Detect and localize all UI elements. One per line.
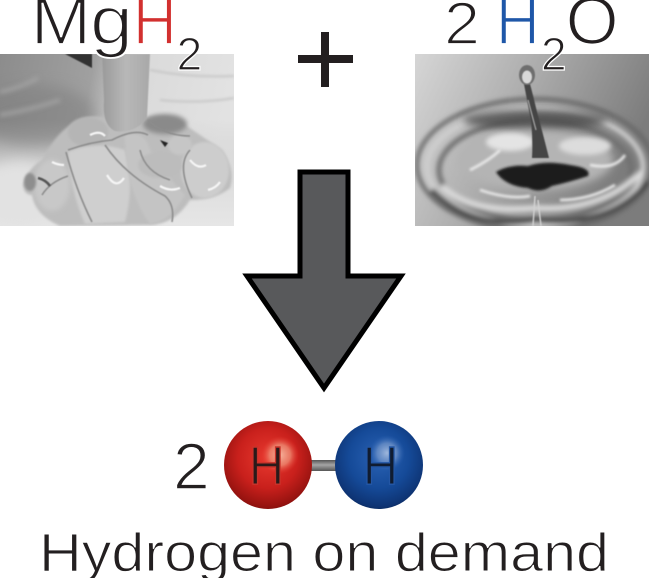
molecule bond	[308, 460, 338, 471]
blue hydrogen atom	[335, 421, 423, 509]
formula: 2 H2O	[444, 0, 619, 80]
arrow: reaction direction, pointing down	[247, 172, 401, 388]
formula: MgH2	[31, 0, 202, 80]
plus sign	[298, 32, 353, 87]
red hydrogen atom: H	[249, 436, 284, 496]
blue hydrogen atom: H	[363, 436, 398, 496]
photo: water droplet splash with ripples	[415, 54, 650, 231]
red hydrogen atom	[224, 421, 312, 509]
product: 2 H2 molecule	[173, 421, 423, 509]
subscript 2 of H2O: 2	[541, 28, 567, 80]
photo: grey paste poured in a mound	[0, 54, 234, 227]
subscript 2 of MgH2: 2	[177, 28, 202, 80]
coefficient 2: 2	[173, 429, 210, 503]
